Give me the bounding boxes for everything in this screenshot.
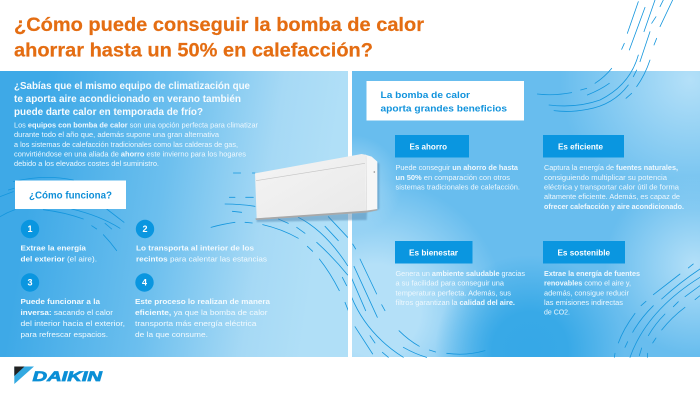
- benefit: es eficiente: Captura la energía de fuentes naturales,: [544, 165, 678, 172]
- benefit: es eficiente: [543, 135, 684, 211]
- benefit: es eficiente: consiguiendo multiplicar su potencia: [544, 175, 667, 182]
- benefit: es eficiente: ofrecer calefacción y aire acondicionado.: [544, 204, 684, 211]
- benefit: es bienestar: [395, 241, 526, 307]
- logo: Daikin: DAIKIN: [32, 369, 102, 384]
- title: [14, 14, 424, 62]
- benefit: es bienestar: Genera un ambiente saludable gracias: [396, 271, 526, 278]
- benefit: es eficiente: Es eficiente: [558, 142, 604, 152]
- step 2: recintos para calentar las estancias: [136, 254, 267, 264]
- air conditioning unit: [255, 154, 379, 222]
- heading: cómo funciona: [15, 180, 126, 209]
- step 2: 2: [142, 224, 148, 234]
- intro paragraph: Los equipos con bomba de calor son una opción perfecta para climatizar: [14, 122, 259, 130]
- benefit: es sostenible: renovables como el aire y,: [544, 281, 631, 288]
- benefit: es sostenible: Extrae la energía de fuentes: [544, 271, 640, 278]
- benefit: es sostenible: además, consigue reducir: [544, 290, 630, 297]
- benefit: es sostenible: de CO2.: [544, 310, 570, 317]
- step 4: Este proceso lo realizan de manera: [135, 297, 271, 306]
- step 3: inversa: sacando el calor: [20, 308, 114, 317]
- step 3: [20, 273, 125, 339]
- benefit: es eficiente: eléctrica y transportar calor útil de forma: [544, 185, 679, 192]
- step 1: [20, 220, 97, 264]
- intro heading: ¿Sabías que el mismo equipo de climatización que: [14, 81, 251, 92]
- title: ahorrar hasta un 50% en calefacción?: [14, 40, 373, 62]
- benefit: es ahorro: [395, 135, 520, 192]
- step 4: eficiente, ya que la bomba de calor: [135, 308, 268, 317]
- heading: cómo funciona: ¿Cómo funciona?: [29, 190, 112, 202]
- intro heading: [14, 81, 251, 118]
- intro paragraph: [14, 122, 259, 168]
- intro heading: te aporta aire acondicionado en verano también: [14, 94, 241, 105]
- divider: [348, 71, 352, 357]
- benefit: es sostenible: las emisiones indirectas: [544, 300, 624, 307]
- benefit: es sostenible: [543, 241, 640, 317]
- heading: beneficios: [366, 81, 524, 120]
- step 4: 4: [142, 278, 147, 288]
- heading: beneficios: La bomba de calor: [380, 90, 470, 101]
- intro paragraph: convirtiéndose en una aliada de ahorro este invierno para los hogares: [14, 152, 247, 159]
- step 3: 3: [27, 278, 33, 288]
- step 1: Extrae la energía: [20, 244, 87, 252]
- step 3: Puede funcionar a la: [20, 297, 101, 306]
- step 4: [135, 273, 271, 339]
- benefit: es bienestar: filtros garantizan la calidad del aire.: [396, 300, 515, 307]
- benefit: es ahorro: Puede conseguir un ahorro de hasta: [396, 165, 518, 172]
- benefit: es bienestar: Es bienestar: [409, 248, 458, 258]
- step 4: transporta más energía eléctrica: [135, 319, 257, 328]
- benefit: es ahorro: un 50% en comparación con otros: [396, 175, 511, 182]
- step 2: Lo transporta al interior de los: [136, 244, 254, 252]
- heading: beneficios: aporta grandes beneficios: [380, 104, 507, 114]
- intro paragraph: a los sistemas de calefacción tradicionales como las calderas de gas,: [14, 142, 238, 149]
- benefit: es bienestar: a su facilidad para conseguir una: [396, 281, 504, 288]
- benefit: es ahorro: Es ahorro: [410, 142, 447, 152]
- panel: right background: [352, 71, 700, 357]
- panel: left background: [0, 71, 348, 357]
- step 1: del exterior (el aire).: [20, 254, 97, 264]
- benefit: es sostenible: Es sostenible: [558, 248, 611, 258]
- step 3: para refrescar espacios.: [20, 330, 108, 339]
- intro heading: puede darte calor en temporada de frío?: [14, 107, 203, 118]
- step 4: de la que consume.: [135, 330, 208, 339]
- step 3: del interior hacia el exterior,: [20, 319, 125, 328]
- benefit: es ahorro: sistemas tradicionales de calefacción.: [396, 185, 520, 192]
- benefit: es eficiente: altamente eficiente. Además, es capaz de: [544, 194, 680, 201]
- title: ¿Cómo puede conseguir la bomba de calor: [14, 14, 424, 36]
- benefit: es bienestar: temperatura perfecta. Además, sus: [396, 290, 512, 297]
- intro paragraph: debido a los elevados costes del suministro.: [14, 161, 159, 168]
- logo: Daikin: [14, 366, 102, 384]
- step 2: [136, 220, 267, 264]
- intro paragraph: durante todo el año que, además supone una gran alternativa: [14, 132, 219, 139]
- step 1: 1: [27, 224, 33, 234]
